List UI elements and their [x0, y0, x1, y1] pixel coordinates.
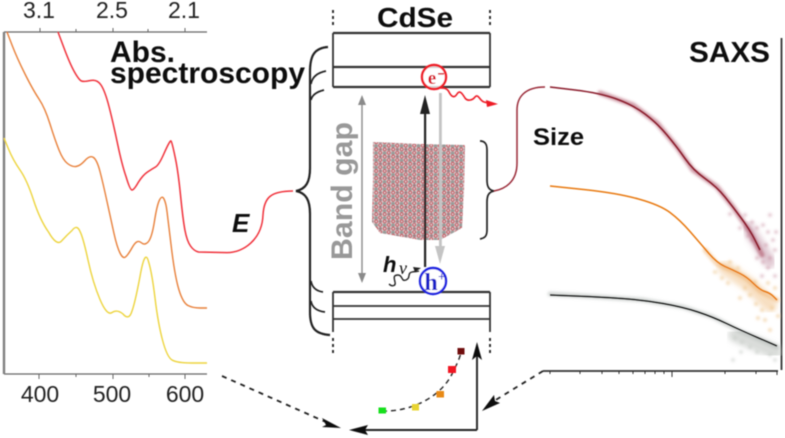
top axis labels [23, 0, 200, 23]
orange fit curve [550, 186, 777, 300]
bottom axis labels [21, 381, 204, 407]
orange absorption curve [7, 32, 207, 308]
sizing curve data points [378, 348, 464, 414]
grey scatter [550, 294, 777, 360]
hole: + [438, 269, 445, 284]
point: green [378, 408, 386, 414]
emission arrow [435, 93, 445, 264]
dashed arrow from absorption [222, 376, 341, 428]
dark red scatter [600, 93, 776, 276]
band gap label: Band gap [326, 122, 359, 260]
photon label: h [383, 252, 396, 277]
curly bracket: energy levels [296, 47, 330, 335]
point: red [448, 366, 456, 373]
dark red fit curve [550, 87, 760, 250]
point: orange [436, 391, 444, 398]
band gap double arrow [358, 95, 366, 283]
excitation arrow [420, 95, 430, 267]
point: dark red [458, 348, 464, 354]
hole: h [424, 270, 438, 296]
energy label: E [232, 208, 250, 238]
orange scatter [705, 250, 778, 330]
bottom axis labels: 500 [93, 381, 131, 407]
SAXS axes [543, 38, 782, 377]
photon label [383, 252, 407, 278]
point: yellow [412, 404, 419, 410]
bottom axis labels: 400 [21, 381, 59, 407]
title: CdSe: CdSe [377, 2, 453, 33]
valence band [333, 292, 490, 353]
photon label: ν [399, 258, 407, 278]
nanocrystal [372, 142, 465, 240]
bottom axis labels: 600 [166, 381, 204, 407]
sizing curve axes [349, 342, 482, 435]
red absorption curve [58, 32, 293, 253]
chart axes [4, 28, 207, 379]
right bracket: size [480, 141, 494, 239]
heading: abs. spectroscopy [110, 36, 305, 90]
size label: Size [533, 124, 584, 151]
size connector curve [494, 87, 545, 191]
heading: abs. spectroscopy: spectroscopy [110, 57, 305, 90]
SAXS chart [543, 37, 782, 377]
black fit curve [550, 295, 777, 346]
absorption spectroscopy chart [4, 0, 305, 407]
SAXS heading: SAXS [689, 37, 770, 69]
yellow absorption curve [4, 138, 207, 363]
electron [422, 65, 446, 89]
hole [420, 268, 446, 296]
electron: e [428, 68, 436, 89]
emission wavy arrow [440, 88, 498, 107]
photon wavy arrow [389, 267, 421, 286]
conduction band [333, 10, 490, 87]
heading: abs. spectroscopy: Abs. [110, 36, 175, 69]
dashed arrow from SAXS [482, 371, 543, 411]
